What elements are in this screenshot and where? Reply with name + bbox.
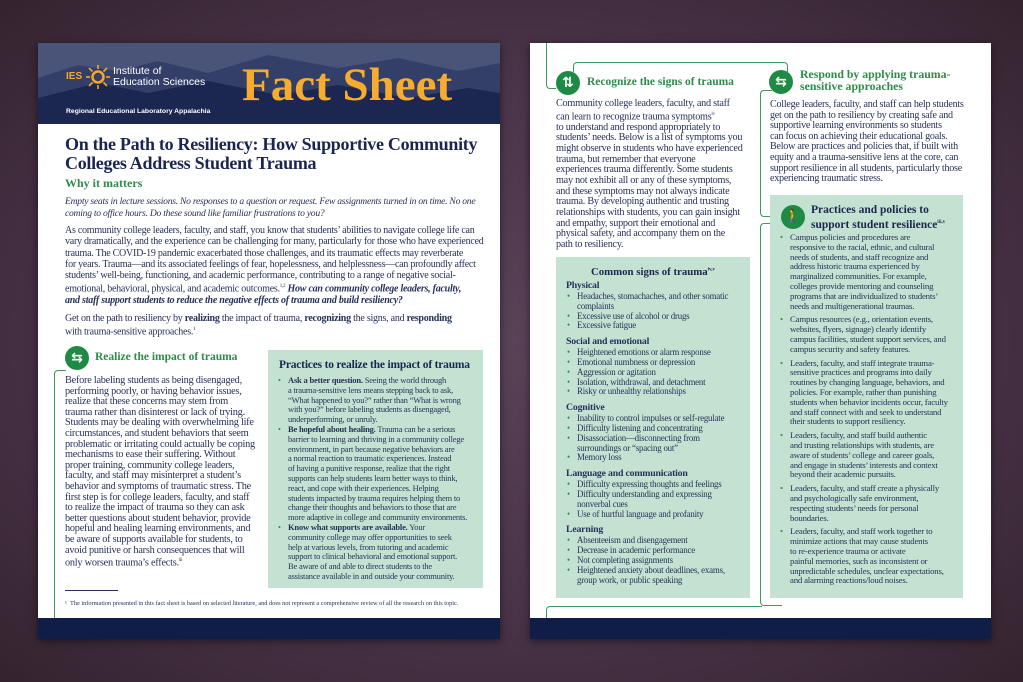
bullets: Leaders, faculty, and staff integrate trauma- xyxy=(790,358,934,368)
bullets xyxy=(278,375,467,581)
bullets: and staff connect with and seek to understand xyxy=(790,407,941,417)
bullets: more adaptive in college and community environments. xyxy=(288,512,467,522)
realize text: Before labeling students as being disengaged, xyxy=(65,375,242,386)
signs list: nonverbal cues xyxy=(577,499,628,509)
bullets: Leaders, faculty, and staff work together to xyxy=(790,526,932,536)
box heading: Practices to realize the impact of trauma xyxy=(279,359,470,371)
bullets: Campus resources (e.g., orientation events, xyxy=(790,314,933,324)
panel: practices to realize xyxy=(268,350,483,588)
realize text: to realize the impact of trauma so they can ask xyxy=(65,502,245,513)
respond text: College leaders, faculty, and staff can help students xyxy=(770,99,964,110)
bullets: Leaders, faculty, and staff create a physically xyxy=(790,483,939,493)
signs list: Heightened anxiety about deadlines, exams, xyxy=(577,565,725,575)
bullets: policies. For example, rather than punishing xyxy=(790,387,936,397)
bullets: painful memories, such as inconsistent or xyxy=(790,556,927,566)
bullets: assistance available in and outside your community. xyxy=(288,571,455,581)
heading xyxy=(811,204,946,230)
recognize text: trauma, but remember that everyone xyxy=(556,154,695,165)
respond text: get on the path to resiliency by creating safe and xyxy=(770,110,953,121)
heading: realize: Realize the impact of trauma xyxy=(95,351,237,363)
recognize text: can learn to recognize trauma symptomsiv xyxy=(556,111,715,122)
icon: respond xyxy=(769,70,793,94)
recognize text: to understand and respond appropriately to xyxy=(556,122,720,133)
intro paragraph xyxy=(65,225,484,306)
bullets: supports can help students learn better ways to think, xyxy=(288,473,457,483)
intro italic: coming to office hours. Do these sound like familiar frustrations to you? xyxy=(65,208,324,219)
bullets: of having a punitive response, realize that the right xyxy=(288,463,450,473)
signs list: Inability to control impulses or self-regulate xyxy=(577,413,724,423)
recognize text: might observe in students who have experienced xyxy=(556,143,743,154)
bullets: support to clinical behavioral and emotional support. xyxy=(288,551,457,561)
bullets: minimize actions that may cause students xyxy=(790,536,928,546)
intro paragraph: for years. Trauma—and its associated feelings of fear, hopelessness, and helplessness—can profoundly affect xyxy=(65,259,476,270)
signs list: surroundings or “spacing out” xyxy=(577,443,678,453)
bullets: underperforming, or unruly. xyxy=(288,414,377,424)
signs list: Aggression or agitation xyxy=(577,367,656,377)
bullets: and trusting relationships with students, are xyxy=(790,440,934,450)
bullets: Leaders, faculty, and staff build authentic xyxy=(790,430,927,440)
heading: Practices and policies to xyxy=(811,204,929,216)
intro paragraph: and staff support students to reduce the negative effects of trauma and build resiliency? xyxy=(65,295,403,306)
recognize text: Community college leaders, faculty, and staff xyxy=(556,98,730,109)
icon: recognize: ⇅ xyxy=(562,75,574,91)
panel: left page xyxy=(38,43,500,639)
bullets: community college may offer opportunities to seek xyxy=(288,532,452,542)
realize text: first step is for college leaders, faculty, and staff xyxy=(65,492,249,503)
heading: respond xyxy=(800,67,950,93)
signs list: group work, or public speaking xyxy=(577,575,682,585)
respond text: equity and a trauma-sensitive lens at the core, can xyxy=(770,152,958,163)
intro italic: Empty seats in lecture sessions. No responses to a question or request. Few assignments turned in on time. No one xyxy=(65,196,475,207)
realize text: trauma rather than disinterest or lack of trying. xyxy=(65,407,245,418)
realize text: faculty, and staff may misinterpret a student’s xyxy=(65,470,241,481)
intro paragraph: trauma. The COVID-19 pandemic exacerbated those challenges, and its traumatic effects may reverberate xyxy=(65,248,463,258)
bullets: respecting students’ needs for personal xyxy=(790,503,918,513)
signs list: Learning xyxy=(566,524,603,535)
bullets xyxy=(780,232,948,585)
bullets: boundaries. xyxy=(790,513,829,523)
footer band xyxy=(38,618,500,639)
intro italic xyxy=(64,196,476,219)
bullets: a trauma-sensitive lens means stepping back to ask, xyxy=(288,385,453,395)
logo: Institute of xyxy=(113,65,161,77)
title: Colleges Address Student Trauma xyxy=(65,153,316,173)
bullets: students impacted by trauma requires helping them to xyxy=(288,493,460,503)
path paragraph: with trauma-sensitive approaches.1 xyxy=(65,327,195,338)
icon: hiker: 🚶 xyxy=(784,209,802,225)
realize text: mechanisms to ease their suffering. Without xyxy=(65,449,235,460)
realize text: only worsen trauma’s effects.iii xyxy=(65,558,182,569)
title: On the Path to Resiliency: How Supportive Community xyxy=(65,134,477,154)
footnote: ¹ The information presented in this fact sheet is based on selected literature, and does not represent a comprehensive review of all the research on this topic. xyxy=(65,600,458,607)
realize text: be aware of supports available for students, to xyxy=(65,534,243,545)
icon: recognize xyxy=(556,71,580,95)
recognize text: path to resiliency. xyxy=(556,239,623,250)
icon: realize xyxy=(65,346,89,370)
respond text: can focus on achieving their educational goals. xyxy=(770,131,947,142)
heading: why it matters: Why it matters xyxy=(65,176,142,190)
signs list: Risky or unhealthy relationships xyxy=(577,386,686,396)
signs list: Excessive fatigue xyxy=(577,320,636,330)
bullets: routines by changing language, behaviors, and xyxy=(790,377,944,387)
bullets: responsive to the racial, ethnic, and cultural xyxy=(790,242,934,252)
bullets: campus security and safety features. xyxy=(790,344,910,354)
bullets: Be hopeful about healing. Trauma can be a serious xyxy=(288,424,455,434)
heading: recognize: Recognize the signs of trauma xyxy=(587,76,734,88)
heading: support student resilienceiii,v xyxy=(811,218,945,230)
respond text xyxy=(770,99,964,184)
heading: respond: sensitive approaches xyxy=(800,79,903,93)
respond text: Below are practices and policies that, if built with xyxy=(770,141,958,152)
bullets: aware of students’ college and career goals, xyxy=(790,450,934,460)
panel: right page xyxy=(530,43,991,639)
signs list: Decrease in academic performance xyxy=(577,545,695,555)
signs list: Use of hurtful language and profanity xyxy=(577,509,703,519)
bullets: and alarming reactions/loud noises. xyxy=(790,575,908,585)
realize text: hopeful and healing learning environments, and xyxy=(65,523,250,534)
signs list: Isolation, withdrawal, and detachment xyxy=(577,377,705,387)
intro paragraph: As community college leaders, faculty, and staff, you know that students’ abilities to navigate college life can xyxy=(65,225,474,236)
logo xyxy=(66,65,205,89)
box heading: Common signs of traumaiv,v xyxy=(591,266,715,278)
signs list: Heightened emotions or alarm response xyxy=(577,347,711,357)
intro paragraph: vary dramatically, and the experience can be challenging for many, particularly for those who have experienced xyxy=(65,236,484,247)
signs list: Difficulty listening and concentrating xyxy=(577,423,703,433)
realize text: avoid punitive or harsh consequences that will xyxy=(65,544,245,556)
signs list: complaints xyxy=(577,301,614,311)
bullets: and engage in students’ interests and context xyxy=(790,460,938,470)
bullets: marginalized communities. For example, xyxy=(790,271,927,281)
signs list: Emotional numbness or depression xyxy=(577,357,695,367)
recognize text: relationships with students, you can gain insight xyxy=(556,207,740,218)
realize text: circumstances, and student behaviors that seem xyxy=(65,428,249,439)
footer band xyxy=(530,618,991,639)
path paragraph xyxy=(65,313,452,338)
bullets: Be aware of and able to direct students to the xyxy=(288,561,432,571)
bullets: change their thoughts and behaviors to those that are xyxy=(288,502,456,512)
header banner xyxy=(38,43,500,124)
bullets: Ask a better question. Seeing the world through xyxy=(288,375,446,385)
signs list: Excessive use of alcohol or drugs xyxy=(577,311,689,321)
recognize text: physical safety, and accompany them on the xyxy=(556,228,725,239)
recognize text: trauma. By developing authentic and trusting xyxy=(556,196,729,207)
realize text: performing poorly, or having behavior issues, xyxy=(65,386,242,397)
icon: realize: ⇆ xyxy=(71,350,83,366)
bullets: campus facilities, student support services, and xyxy=(790,334,946,344)
realize text: problematic or irritating could actually be coping xyxy=(65,439,255,450)
signs list: Difficulty expressing thoughts and feelings xyxy=(577,479,722,489)
bullets: Campus policies and procedures are xyxy=(790,232,910,242)
realize text xyxy=(65,375,255,569)
path paragraph: Get on the path to resiliency by realizing the impact of trauma, recognizing the signs, and responding xyxy=(65,313,452,324)
bullets: programs that are individualized to students’ xyxy=(790,291,938,301)
realize text: realize that these concerns may stem from xyxy=(65,396,228,407)
bullets: barrier to learning and thriving in a community college xyxy=(288,434,464,444)
respond text: supportive learning environments so students xyxy=(770,120,942,131)
fact sheet title: Fact Sheet xyxy=(242,59,452,111)
bullets: their students to support resiliency. xyxy=(790,416,905,426)
signs list: Headaches, stomachaches, and other somatic xyxy=(577,291,728,301)
title xyxy=(65,134,478,173)
signs list: Not completing assignments xyxy=(577,555,673,565)
logo: Education Sciences xyxy=(113,76,205,88)
bullets: students when behavior incidents occur, faculty xyxy=(790,397,948,407)
respond text: experiencing traumatic stress. xyxy=(770,173,883,184)
realize text: behavior and symptoms of traumatic stress. The xyxy=(65,481,251,492)
recognize text: experiences trauma differently. Some students xyxy=(556,164,733,175)
bullets: environment, in part because negative behaviors are xyxy=(288,444,455,454)
recognize text: students’ needs. Below is a list of symptoms you xyxy=(556,132,742,143)
realize text: Students may be dealing with overwhelming life xyxy=(65,417,254,428)
icon: respond: ⇆ xyxy=(775,74,787,90)
logo: IES xyxy=(66,71,82,82)
recognize text: and these symptoms may not always indicate xyxy=(556,186,729,197)
bullets: unpredictable schedules, unclear expectations, xyxy=(790,566,944,576)
signs list: Social and emotional xyxy=(566,336,649,347)
signs list: Memory loss xyxy=(577,452,621,462)
recognize text xyxy=(556,98,743,250)
realize text: better questions about student behavior, provide xyxy=(65,513,250,524)
respond text: support resilience in all students, particularly those xyxy=(770,163,962,174)
bullets: and psychologically safe environment, xyxy=(790,493,918,503)
signs list: Difficulty understanding and expressing xyxy=(577,489,712,499)
bullets: websites, flyers, signage) clearly identify xyxy=(790,324,926,334)
bullets: “What happened to you?” rather than “What is wrong xyxy=(288,395,461,405)
signs list: Cognitive xyxy=(566,402,604,413)
panel: common signs xyxy=(556,257,750,598)
bullets: address historic trauma experienced by xyxy=(790,261,920,271)
bullets: needs and multigenerational traumas. xyxy=(790,301,914,311)
bullets: a normal reaction to traumatic experiences. Instead xyxy=(288,453,451,463)
bullets: with you?” before labeling students as disengaged, xyxy=(288,404,451,414)
bullets: react, and cope with their experiences. Helping xyxy=(288,483,439,493)
bullets: help at various levels, from tutoring and academic xyxy=(288,542,448,552)
lab name: Regional Educational Laboratory Appalachia xyxy=(66,108,210,115)
bullets: needs of students, and staff recognize and xyxy=(790,252,928,262)
bullets: beyond their academic pursuits. xyxy=(790,469,896,479)
panel: practices and policies xyxy=(770,195,963,598)
bullets: Know what supports are available. Your xyxy=(288,522,425,532)
signs list: Absenteeism and disengagement xyxy=(577,535,688,545)
bullets: colleges provide mentoring and counseling xyxy=(790,281,933,291)
intro paragraph: students’ well-being, functioning, and academic performance, contributing to a range of negative social- xyxy=(65,270,456,281)
signs list xyxy=(566,280,728,585)
icon: hiker xyxy=(781,205,805,229)
heading: respond: Respond by applying trauma- xyxy=(800,67,950,81)
intro paragraph: emotional, behavioral, physical, and academic outcomes.1,2 How can community college leaders, faculty, xyxy=(65,284,461,295)
bullets: to re-experience trauma or activate xyxy=(790,546,906,556)
signs list: Physical xyxy=(566,280,599,291)
recognize text: may not exhibit all or any of these symptoms, xyxy=(556,175,731,186)
recognize text: and empathy, support their emotional and xyxy=(556,218,715,229)
signs list: Disassociation—disconnecting from xyxy=(577,433,700,443)
signs list: Language and communication xyxy=(566,468,688,479)
realize text: proper training, community college leaders, xyxy=(65,460,234,471)
bullets: sensitive practices and programs into daily xyxy=(790,367,932,377)
